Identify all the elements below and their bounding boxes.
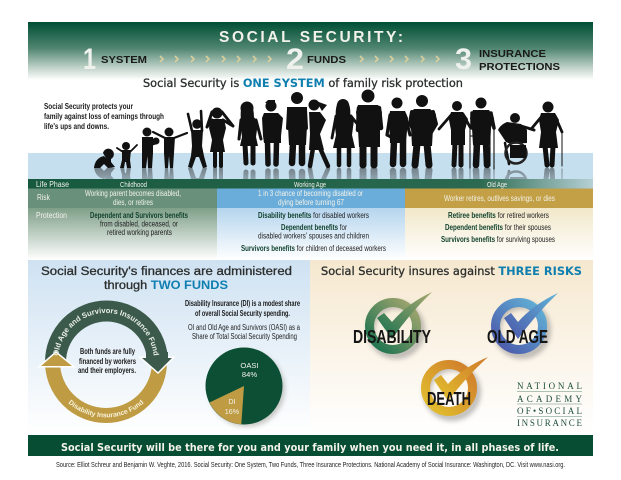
pie chart: 84%	[242, 370, 257, 379]
logo: national academy of social insurance: INSURANCE	[517, 418, 582, 428]
step 2 funds: FUNDS	[307, 54, 346, 66]
working age column: Survivors benefits for children of deceased workers	[241, 244, 386, 253]
fund cycle arrows: Old Age and Survivors Insurance Fund	[53, 308, 160, 356]
logo: national academy of social insurance: NATIONAL	[517, 381, 582, 391]
working age column: 1 in 3 chance of becoming disabled or	[258, 189, 363, 198]
icon: old age check	[487, 293, 558, 355]
logo: national academy of social insurance: ACADEMY	[517, 394, 582, 404]
DI description: OI and Old Age and Survivors (OASI) as a	[188, 323, 301, 332]
DI description	[185, 299, 301, 341]
fund cycle arrows: Disability Insurance Fund	[68, 400, 144, 418]
childhood column: dies, or retires	[113, 198, 153, 207]
working age column	[241, 189, 386, 253]
logo: national academy of social insurance: OF•SOCIAL	[517, 406, 582, 416]
step 3 insurance protections: PROTECTIONS	[479, 61, 560, 73]
working age column: disabled workers' spouses and children	[258, 232, 369, 240]
fund cycle arrows	[37, 300, 176, 423]
ring centre text: financed by workers	[79, 357, 136, 366]
heading: two funds	[41, 266, 292, 292]
childhood column: Dependent and Survivors benefits	[90, 211, 189, 220]
childhood column: from disabled, deceased, or	[100, 220, 178, 228]
working age column: Dependent benefits for	[281, 223, 347, 232]
step 1 system: SYSTEM	[101, 54, 147, 66]
icon: death check	[426, 357, 488, 417]
step 1 system: 1	[83, 43, 96, 76]
old age column: Dependent benefits for their spouses	[445, 223, 551, 232]
intro text	[44, 102, 164, 131]
step 2 funds	[286, 43, 346, 76]
dark arc: old age and survivors fund	[56, 311, 158, 362]
row labels: Risk	[37, 192, 51, 202]
DI description: of overall Social Security spending.	[195, 309, 290, 318]
heading: two funds: through TWO FUNDS	[104, 280, 228, 292]
panel: three risks	[310, 260, 593, 435]
life phase bar: Working Age	[294, 180, 326, 189]
row labels	[36, 192, 67, 220]
reflection of people	[94, 166, 562, 179]
ring centre text: Both funds are fully	[80, 347, 135, 356]
old age column: Survivors benefits for surviving spouses	[441, 235, 555, 244]
chevrons between 1 and 2	[160, 56, 271, 62]
step 3 insurance protections: INSURANCE	[479, 48, 546, 60]
childhood column	[85, 189, 189, 237]
panel: two funds	[28, 260, 310, 430]
risk and protection backgrounds	[28, 208, 217, 260]
title: SOCIAL SECURITY:	[219, 29, 403, 46]
step 3 insurance protections	[455, 43, 560, 76]
header banner	[28, 22, 593, 80]
childhood column: Working parent becomes disabled,	[85, 189, 181, 198]
life phase bar: Old Age	[487, 180, 507, 189]
panel: life stages table	[28, 179, 593, 260]
old age column: Worker retires, outlives savings, or dies	[444, 194, 555, 203]
old age column: Retiree benefits for retired workers	[448, 211, 549, 220]
ring centre text: and their employers.	[78, 366, 136, 375]
working age column: dying before turning 67	[278, 198, 344, 207]
icon: old age check: OLD AGE	[487, 327, 548, 347]
pie chart: OASI	[240, 361, 259, 370]
step 2 funds: 2	[286, 43, 304, 76]
heading: three risks: Social Security insures against THREE RISKS	[321, 264, 582, 278]
floor band	[28, 153, 593, 180]
life phase bar: Life Phase	[36, 180, 69, 189]
heading: two funds: Social Security's finances are administered	[41, 266, 292, 278]
DI description: Disability Insurance (DI) is a modest share	[185, 299, 300, 308]
heading: one system: Social Security is ONE SYSTEM of family risk protection	[143, 76, 463, 90]
life phase bar: Childhood	[120, 180, 147, 189]
step 3 insurance protections: 3	[455, 43, 472, 76]
icon: disability check	[353, 292, 432, 355]
ring centre text	[78, 347, 136, 375]
footer banner	[28, 435, 593, 456]
life phase bar	[28, 179, 593, 189]
icon: death check: DEATH	[427, 389, 471, 409]
gold arc: disability fund	[52, 362, 160, 415]
footer banner: Social Security will be there for you and your family when you need it, in all phases of life.	[61, 442, 559, 454]
intro text: Social Security protects your	[44, 102, 133, 111]
DI description: Share of Total Social Security Spending	[192, 332, 297, 341]
gold arrowhead	[41, 353, 72, 366]
pie chart: DI	[228, 397, 236, 406]
pie chart: 16%	[225, 407, 240, 416]
dark arrowhead	[142, 358, 172, 372]
icon: disability check: DISABILITY	[353, 327, 431, 347]
working age column: Disability benefits for disabled workers	[258, 211, 369, 220]
intro text: life's ups and downs.	[44, 122, 109, 131]
chevrons between 2 and 3	[360, 56, 439, 62]
logo: national academy of social insurance	[517, 381, 582, 428]
step 1 system	[83, 43, 147, 76]
intro text: family against loss of earnings through	[44, 112, 164, 121]
row labels: Protection	[36, 210, 67, 220]
old age column	[441, 194, 555, 244]
pie chart	[206, 348, 285, 427]
silhouettes of people through life stages	[94, 90, 562, 169]
childhood column: retired working parents	[107, 228, 172, 237]
